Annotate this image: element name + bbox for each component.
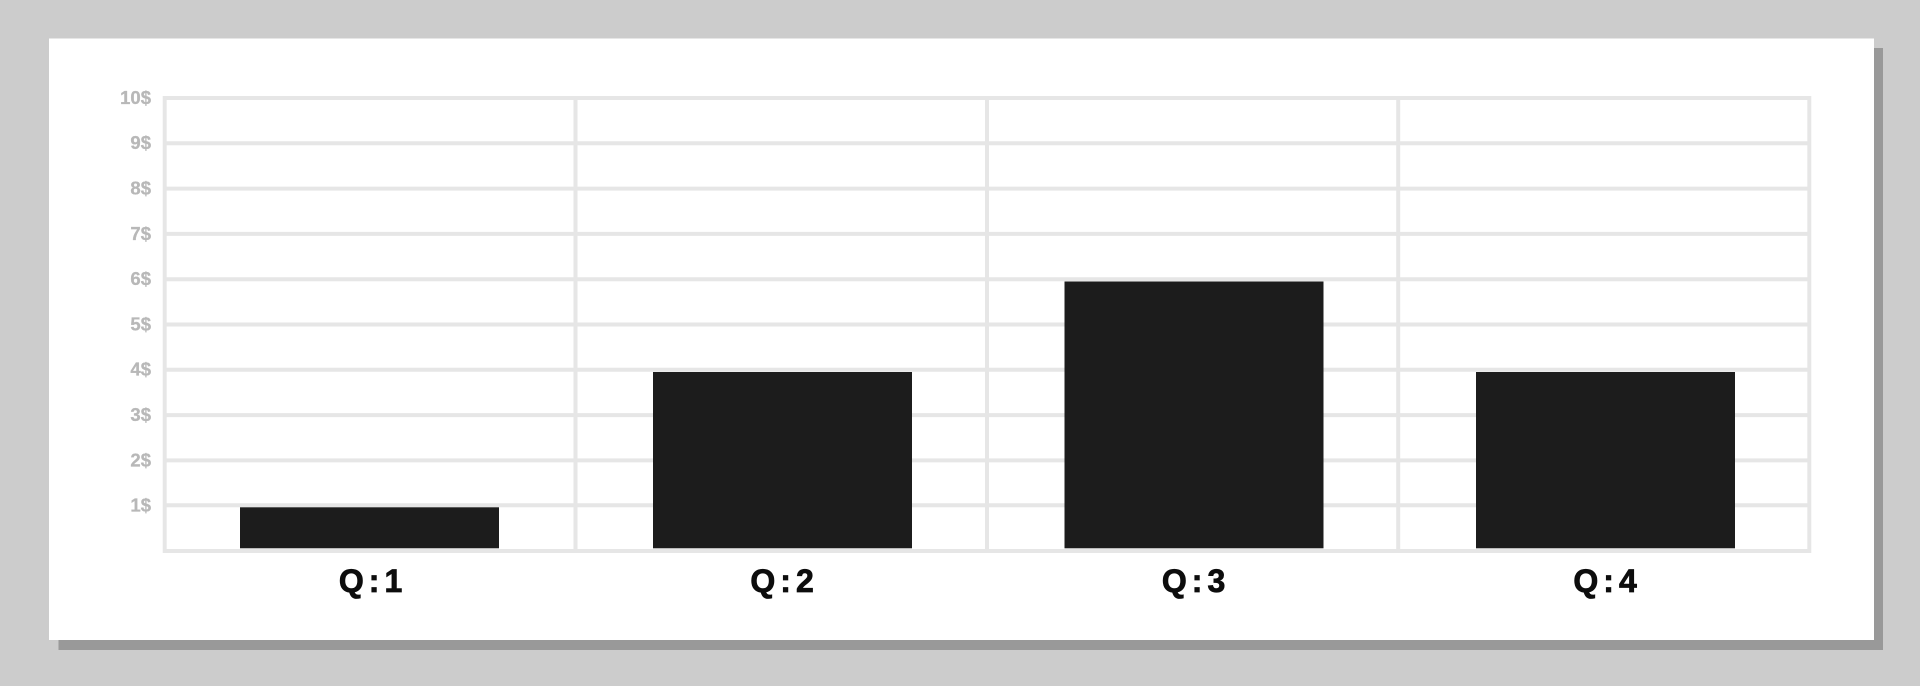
x axis labels: Q : 1 bbox=[339, 563, 401, 599]
y axis labels: 8$ bbox=[130, 178, 152, 198]
y axis labels: 1$ bbox=[130, 494, 152, 516]
y axis labels: 10$ bbox=[120, 87, 152, 108]
y axis labels: 7$ bbox=[130, 223, 152, 244]
bar: Q4 value 4 bbox=[1476, 372, 1735, 548]
y axis labels bbox=[120, 87, 152, 516]
bar: Q2 value 4 bbox=[653, 372, 912, 548]
y axis labels: 2$ bbox=[130, 449, 152, 470]
bar: Q1 value 1 bbox=[240, 507, 499, 548]
x axis labels: Q : 2 bbox=[750, 563, 813, 599]
bar chart bbox=[120, 87, 1811, 599]
bar: Q3 value 6 bbox=[1064, 282, 1324, 548]
y axis labels: 6$ bbox=[130, 268, 152, 289]
y axis labels: 3$ bbox=[130, 404, 152, 425]
x axis labels bbox=[339, 563, 1637, 599]
y axis labels: 4$ bbox=[130, 359, 152, 380]
x axis labels: Q : 3 bbox=[1162, 563, 1224, 599]
x axis labels: Q : 4 bbox=[1573, 563, 1637, 599]
y axis labels: 9$ bbox=[130, 132, 152, 153]
y axis labels: 5$ bbox=[130, 313, 152, 334]
